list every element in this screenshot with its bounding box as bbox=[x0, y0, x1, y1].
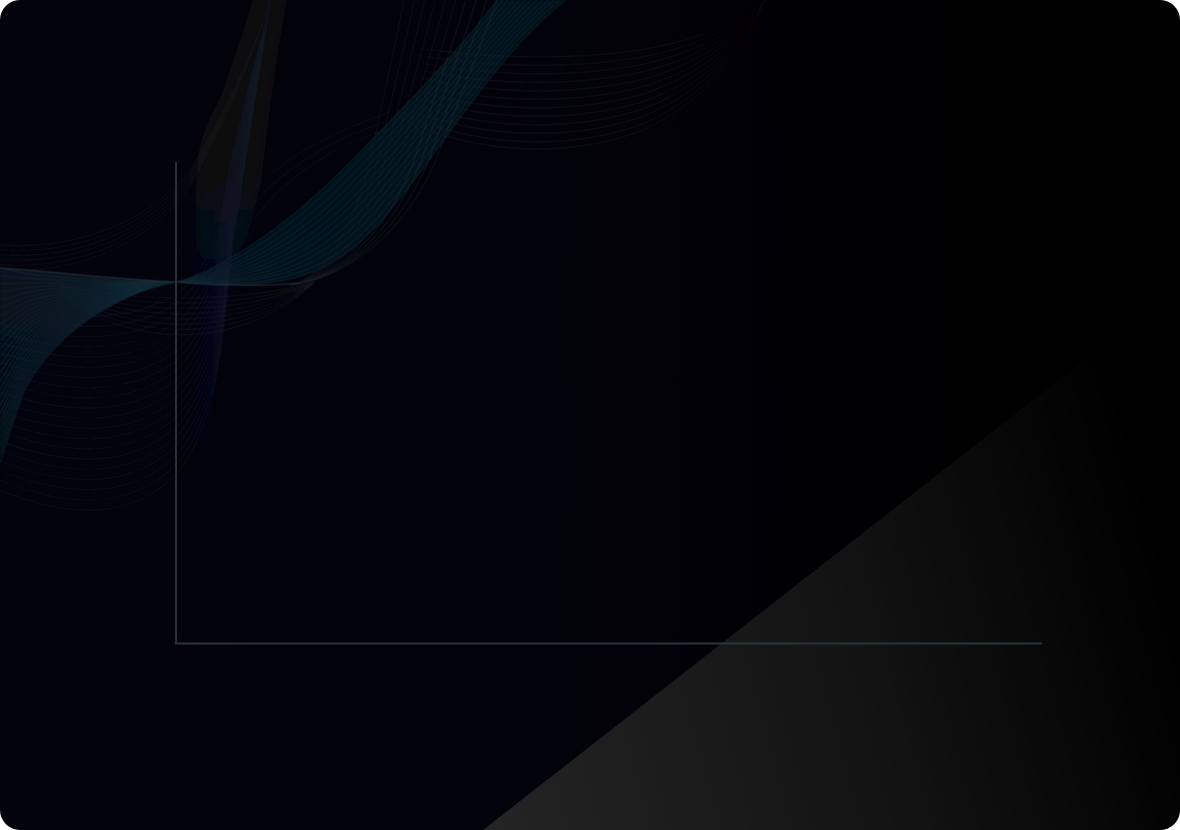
lower right grey triangle bbox=[483, 285, 1180, 830]
line ribbons bbox=[0, 0, 765, 510]
vertical blue ribbon bbox=[190, 0, 290, 510]
ribbon: upper left faint arcs bbox=[0, 0, 390, 270]
vertical axis bbox=[175, 162, 177, 644]
ribbon: top faint arcs bbox=[380, 0, 765, 149]
ribbon: faint vertical strands at top bbox=[290, 0, 456, 285]
ribbon: wide faint lower arcs bbox=[0, 0, 270, 510]
horizontal axis bbox=[175, 642, 1042, 644]
grey strands crossing the teal ribbon bbox=[290, 0, 497, 285]
ribbon: arcs below the pinch bbox=[60, 282, 315, 335]
teal ribbon left of the pinch bbox=[0, 268, 176, 463]
teal ribbon right of the pinch bbox=[176, 0, 566, 285]
